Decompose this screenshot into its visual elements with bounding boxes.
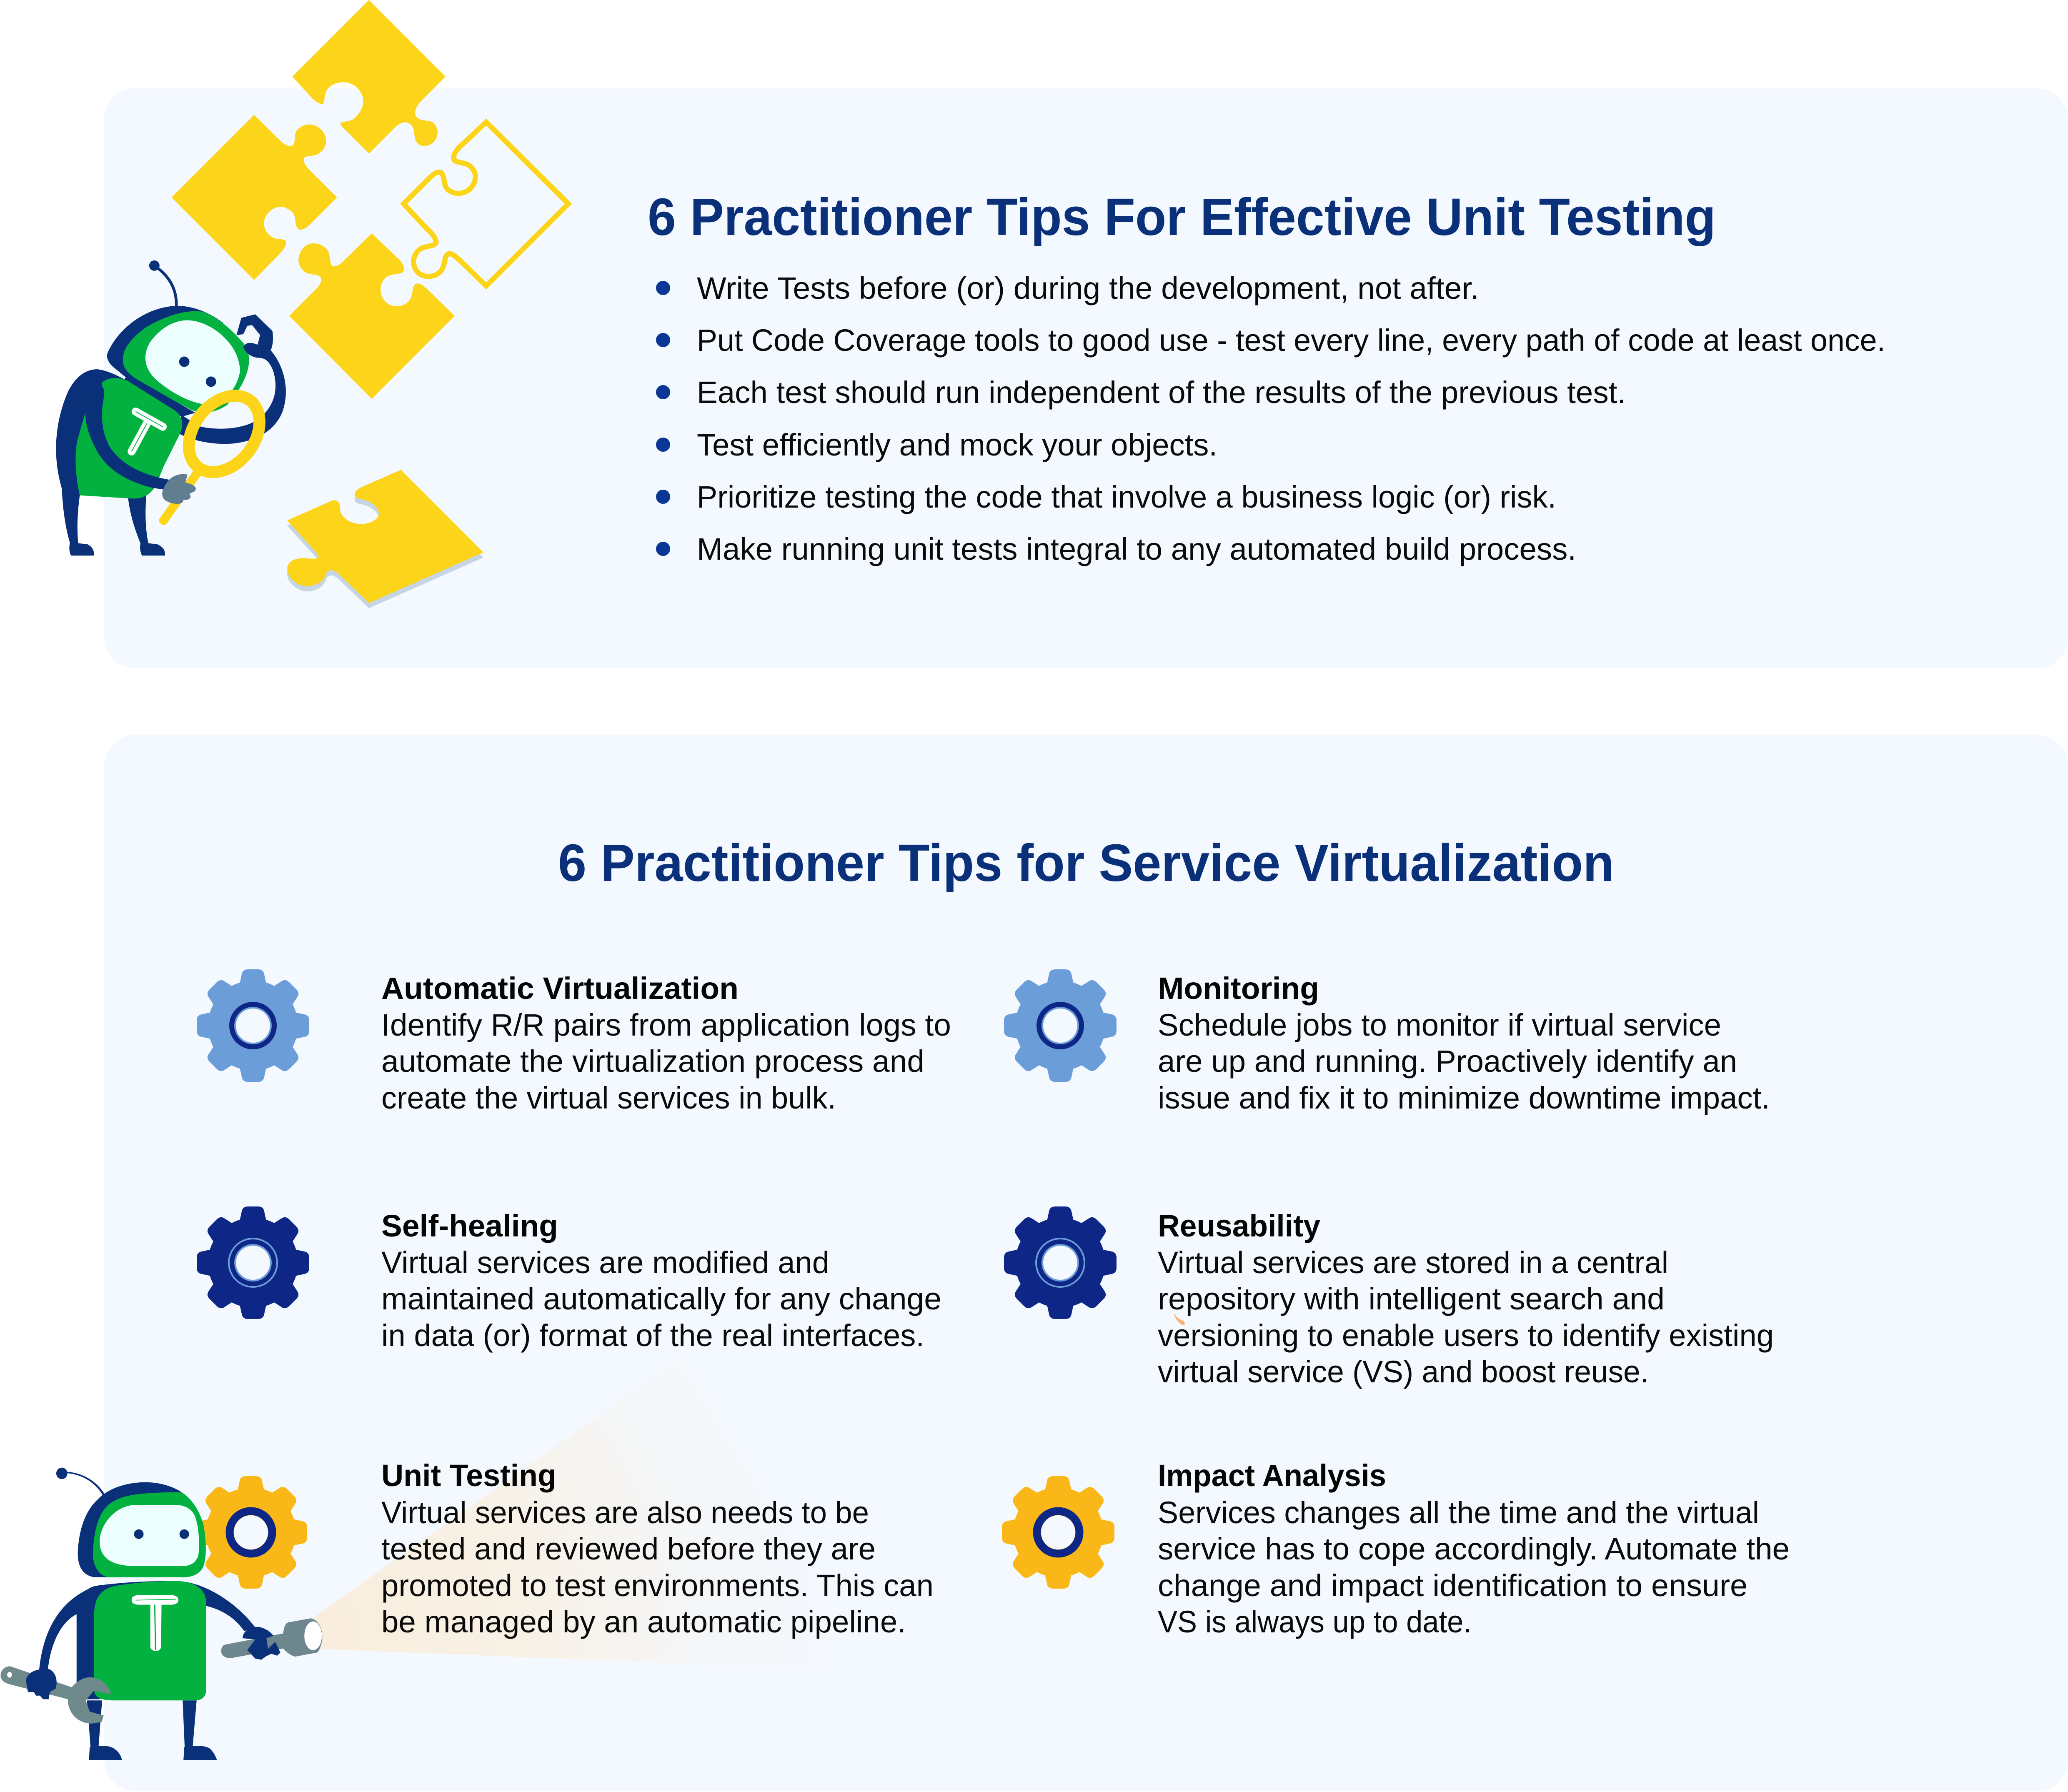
tip: impact analysis: service has to cope accordingly. Automate the xyxy=(1158,1532,1790,1566)
tip: monitoring: are up and running. Proactively identify an xyxy=(1158,1044,1737,1079)
puzzle piece: empty outline xyxy=(403,122,568,286)
puzzle piece: loose on floor xyxy=(287,470,483,603)
tip: automatic virtualization: Automatic Virtualization xyxy=(381,971,739,1006)
tip: automatic virtualization xyxy=(381,971,951,1115)
icon: gear automatic virtualization xyxy=(197,969,309,1082)
bullet list: unit testing tips: Make running unit tests integral to any automated build process. xyxy=(697,532,1576,566)
tip: impact analysis: change and impact identification to ensure xyxy=(1158,1568,1748,1603)
tip: unit testing: be managed by an automatic pipeline. xyxy=(381,1604,906,1639)
robot with wrench and flashlight xyxy=(1,1468,322,1760)
tip: self-healing: maintained automatically for any change xyxy=(381,1281,941,1316)
icon: gear unit testing xyxy=(195,1476,307,1589)
tip: automatic virtualization: Identify R/R pairs from application logs to xyxy=(381,1008,951,1042)
bullet list: unit testing tips xyxy=(656,271,1885,566)
tip: impact analysis: VS is always up to date. xyxy=(1158,1604,1472,1639)
tip: automatic virtualization: create the virtual services in bulk. xyxy=(381,1081,836,1115)
tip: monitoring: issue and fix it to minimize downtime impact. xyxy=(1158,1081,1770,1115)
icon: gear self-healing xyxy=(197,1206,309,1319)
puzzle piece: centre xyxy=(289,233,455,399)
panel: service virtualization tips background xyxy=(104,735,2068,1791)
bullet list: unit testing tips: Each test should run independent of the results of the previous test. xyxy=(697,375,1626,410)
tip: reusability: Virtual services are stored in a central xyxy=(1158,1245,1668,1280)
bullet list: unit testing tips: Test efficiently and mock your objects. xyxy=(697,428,1217,462)
tip: reusability: versioning to enable users to identify existing xyxy=(1158,1318,1774,1353)
puzzle piece shadow xyxy=(287,475,483,608)
tip: reusability: repository with intelligent search and xyxy=(1158,1281,1665,1316)
tip: self-healing: Virtual services are modified and xyxy=(381,1245,829,1280)
tip: reusability: virtual service (VS) and boost reuse. xyxy=(1158,1354,1649,1389)
robot with magnifying glass xyxy=(56,260,286,556)
tip: impact analysis: Impact Analysis xyxy=(1158,1458,1386,1493)
heading: service virtualization tips: 6 Practitioner Tips for Service Virtualization xyxy=(558,833,1614,892)
tip: reusability: Reusability xyxy=(1158,1209,1320,1243)
tip: monitoring xyxy=(1158,971,1770,1115)
tip: monitoring: Monitoring xyxy=(1158,971,1319,1006)
icon: gear reusability xyxy=(1004,1206,1117,1319)
tip: impact analysis: Services changes all the time and the virtual xyxy=(1158,1495,1759,1530)
tip: monitoring: Schedule jobs to monitor if virtual service xyxy=(1158,1008,1721,1042)
tip: automatic virtualization: automate the virtualization process and xyxy=(381,1044,924,1079)
tip: self-healing xyxy=(381,1209,941,1353)
tip: impact analysis xyxy=(1158,1458,1790,1639)
bullet list: unit testing tips: Prioritize testing the code that involve a business logic (or) risk. xyxy=(697,480,1556,514)
bullet list: unit testing tips: Put Code Coverage tools to good use - test every line, every path of code at least once. xyxy=(697,323,1885,358)
tip: unit testing: Unit Testing xyxy=(381,1458,556,1493)
panel: unit testing tips background xyxy=(104,88,2068,668)
tip: self-healing: in data (or) format of the real interfaces. xyxy=(381,1318,924,1353)
tip: reusability xyxy=(1158,1209,1774,1389)
flashlight beam xyxy=(313,1359,875,1671)
icon: gear impact analysis xyxy=(1002,1476,1114,1589)
tip: unit testing: Virtual services are also needs to be xyxy=(381,1495,869,1530)
tip: unit testing: promoted to test environments. This can xyxy=(381,1568,934,1603)
icon: gear monitoring xyxy=(1004,969,1117,1082)
puzzle pieces illustration xyxy=(172,0,568,608)
tip: unit testing xyxy=(381,1458,934,1639)
tip: self-healing: Self-healing xyxy=(381,1209,558,1243)
puzzle piece: left xyxy=(172,115,337,280)
heading: unit testing tips: 6 Practitioner Tips For Effective Unit Testing xyxy=(648,188,1716,246)
puzzle piece: top xyxy=(292,0,446,153)
bullet list: unit testing tips: Write Tests before (or) during the development, not after. xyxy=(697,271,1479,305)
tip: unit testing: tested and reviewed before they are xyxy=(381,1532,876,1566)
